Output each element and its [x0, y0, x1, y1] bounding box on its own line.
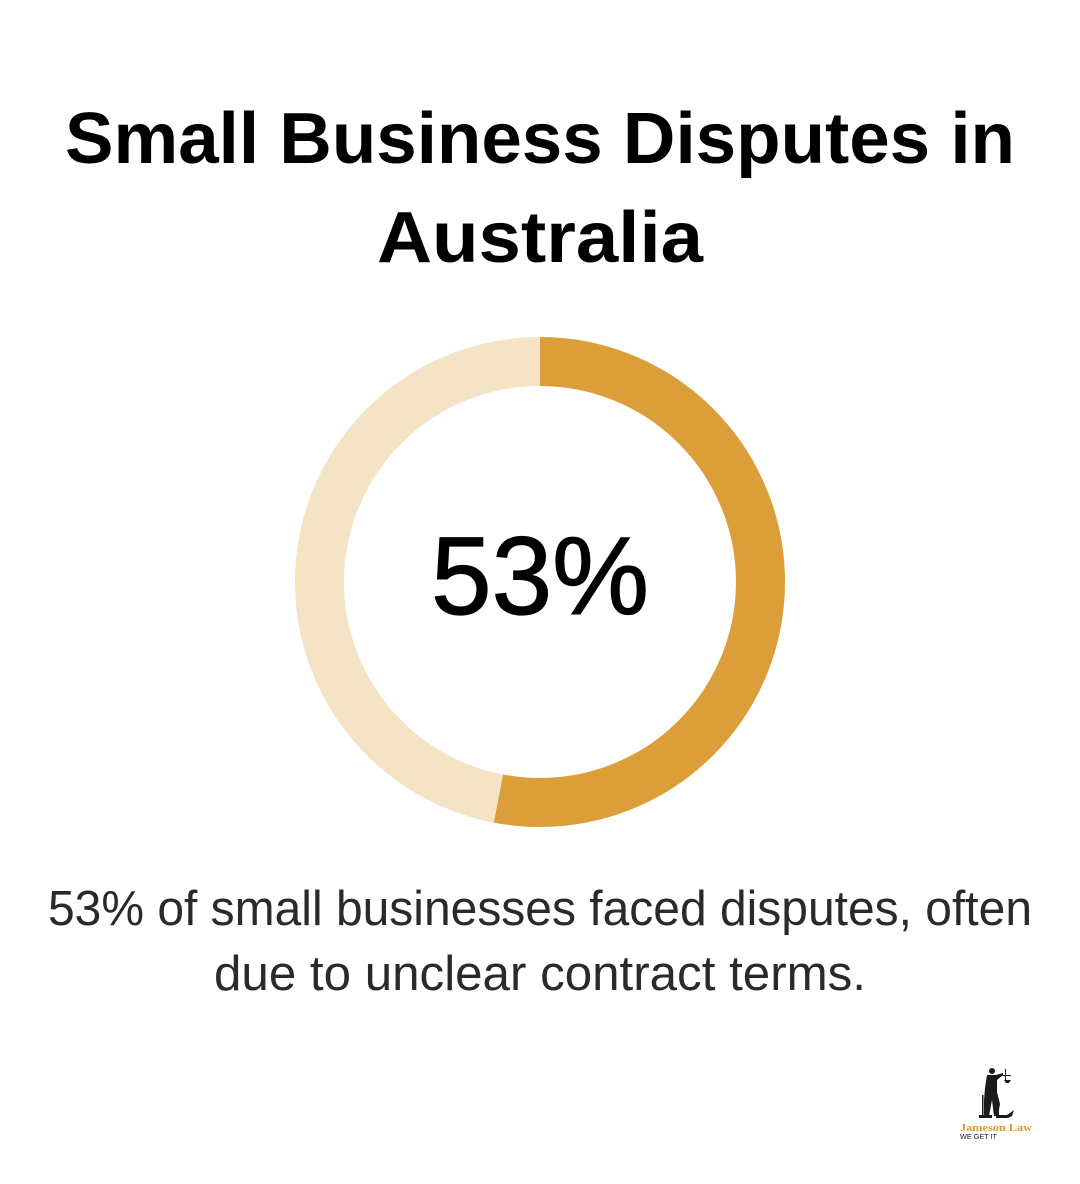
icon: lady justice: [979, 1068, 1014, 1118]
description text: due to unclear contract terms.: [214, 947, 866, 1001]
title: [65, 99, 1015, 278]
title: Small Business Disputes in: [65, 99, 1015, 179]
donut chart: 53%: [320, 362, 760, 802]
title: Australia: [377, 198, 704, 278]
donut value: 53%: [431, 515, 649, 638]
logo: Jameson Law: [960, 1068, 1032, 1141]
logo name: Jameson Law: [960, 1123, 1032, 1134]
logo tagline: WE GET IT: [960, 1134, 998, 1141]
description text: 53% of small businesses faced disputes, often: [48, 882, 1032, 936]
description text: [48, 882, 1032, 1001]
